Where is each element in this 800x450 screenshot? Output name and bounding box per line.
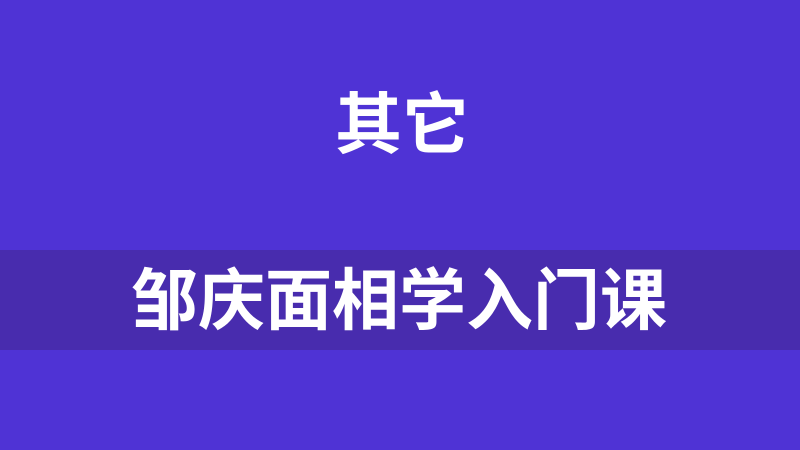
- banner: course title band: [0, 250, 800, 350]
- heading: category title: 其它: [335, 88, 469, 163]
- banner text: course title: 邹庆面相学入门课: [131, 264, 667, 339]
